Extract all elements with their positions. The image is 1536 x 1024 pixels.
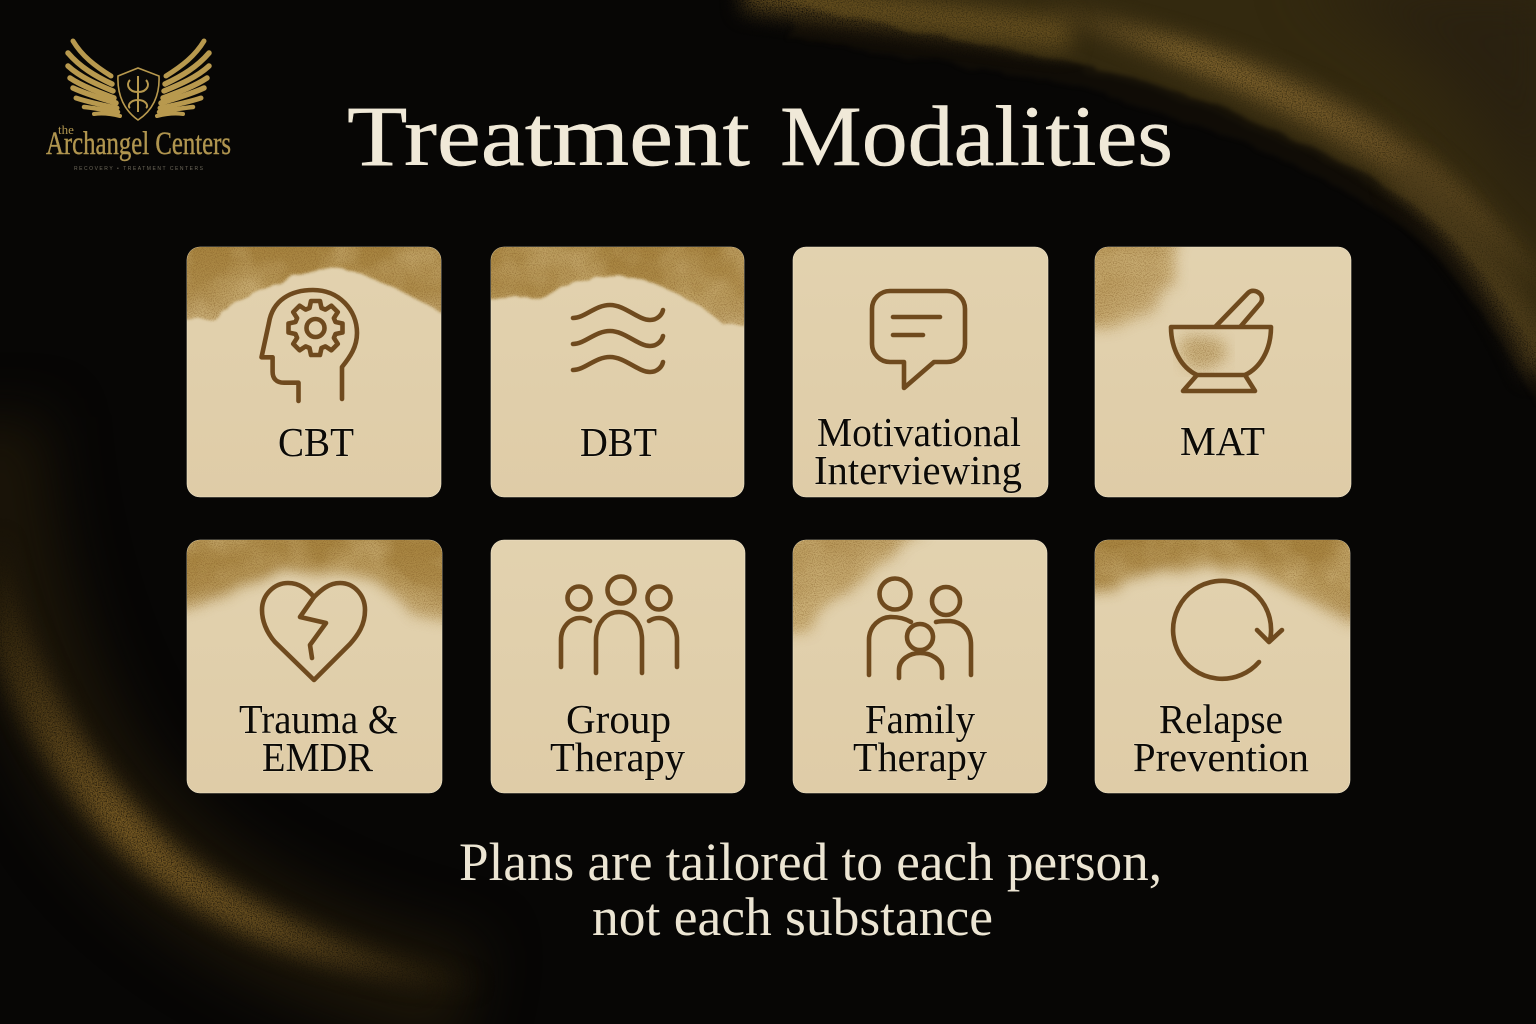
card: Group Therapy: [491, 540, 745, 793]
tagline: not each substance: [592, 887, 993, 947]
stain: Family card: [793, 540, 924, 642]
label: Family Therapy: Therapy: [853, 734, 987, 780]
label: Motivational Interviewing: Interviewing: [814, 447, 1022, 493]
label: Trauma & EMDR: EMDR: [262, 734, 374, 780]
icon: family: [869, 578, 971, 678]
card: CBT: [186, 246, 442, 498]
label: Motivational Interviewing: Motivational: [817, 409, 1021, 455]
card: Relapse Prevention: [1094, 540, 1350, 794]
icon: speech bubble: [872, 291, 965, 388]
tagline: Plans are tailored to each person,: [459, 832, 1162, 892]
stain: CBT card: [187, 247, 441, 322]
icon: group of three people: [561, 576, 677, 673]
label: Family Therapy: [853, 696, 987, 780]
logo wordmark: Archangel Centers: [46, 126, 231, 162]
card: Motivational Interviewing: [793, 247, 1048, 497]
logo wordmark: [46, 122, 231, 172]
icon: shield crest: [118, 68, 159, 120]
icon: broken heart: [262, 583, 365, 680]
logo wordmark: RECOVERY • TREATMENT CENTERS: [74, 166, 204, 172]
tagline: [459, 832, 1162, 947]
label: Group Therapy: Group: [566, 696, 671, 742]
icon: circular arrow: [1173, 581, 1282, 679]
icon: waves: [573, 305, 663, 372]
logo wordmark: the: [58, 122, 74, 137]
label: Motivational Interviewing: [814, 409, 1022, 493]
stain: DBT card: [491, 247, 744, 328]
label: Relapse Prevention: [1133, 696, 1309, 780]
card: Family Therapy: [780, 528, 1047, 793]
label: Relapse Prevention: Relapse: [1159, 696, 1283, 742]
icon: gold wings: [68, 41, 209, 116]
card: MAT: [1085, 235, 1351, 497]
label: MAT: MAT: [1180, 418, 1265, 464]
label: Relapse Prevention: Prevention: [1133, 734, 1309, 780]
logo: The Archangel Centers: [46, 41, 231, 172]
icon: mortar and pestle: [1171, 291, 1271, 391]
card: Trauma & EMDR: [186, 540, 442, 794]
title: Modalities: [780, 88, 1173, 184]
label: Group Therapy: [550, 696, 685, 780]
title: Treatment: [347, 88, 750, 184]
label: Trauma & EMDR: Trauma &: [239, 696, 398, 742]
stain: Relapse card: [1095, 540, 1350, 632]
stain: Trauma card: [187, 540, 442, 630]
label: DBT: DBT: [580, 419, 657, 465]
title: [347, 88, 1173, 184]
icon: head with gear: [262, 290, 357, 401]
card: DBT: [490, 246, 744, 498]
label: Group Therapy: Therapy: [550, 734, 685, 780]
stain: MAT card: [1085, 235, 1226, 370]
label: CBT: CBT: [278, 419, 354, 465]
label: Trauma & EMDR: [239, 696, 398, 780]
label: Family Therapy: Family: [865, 696, 975, 742]
